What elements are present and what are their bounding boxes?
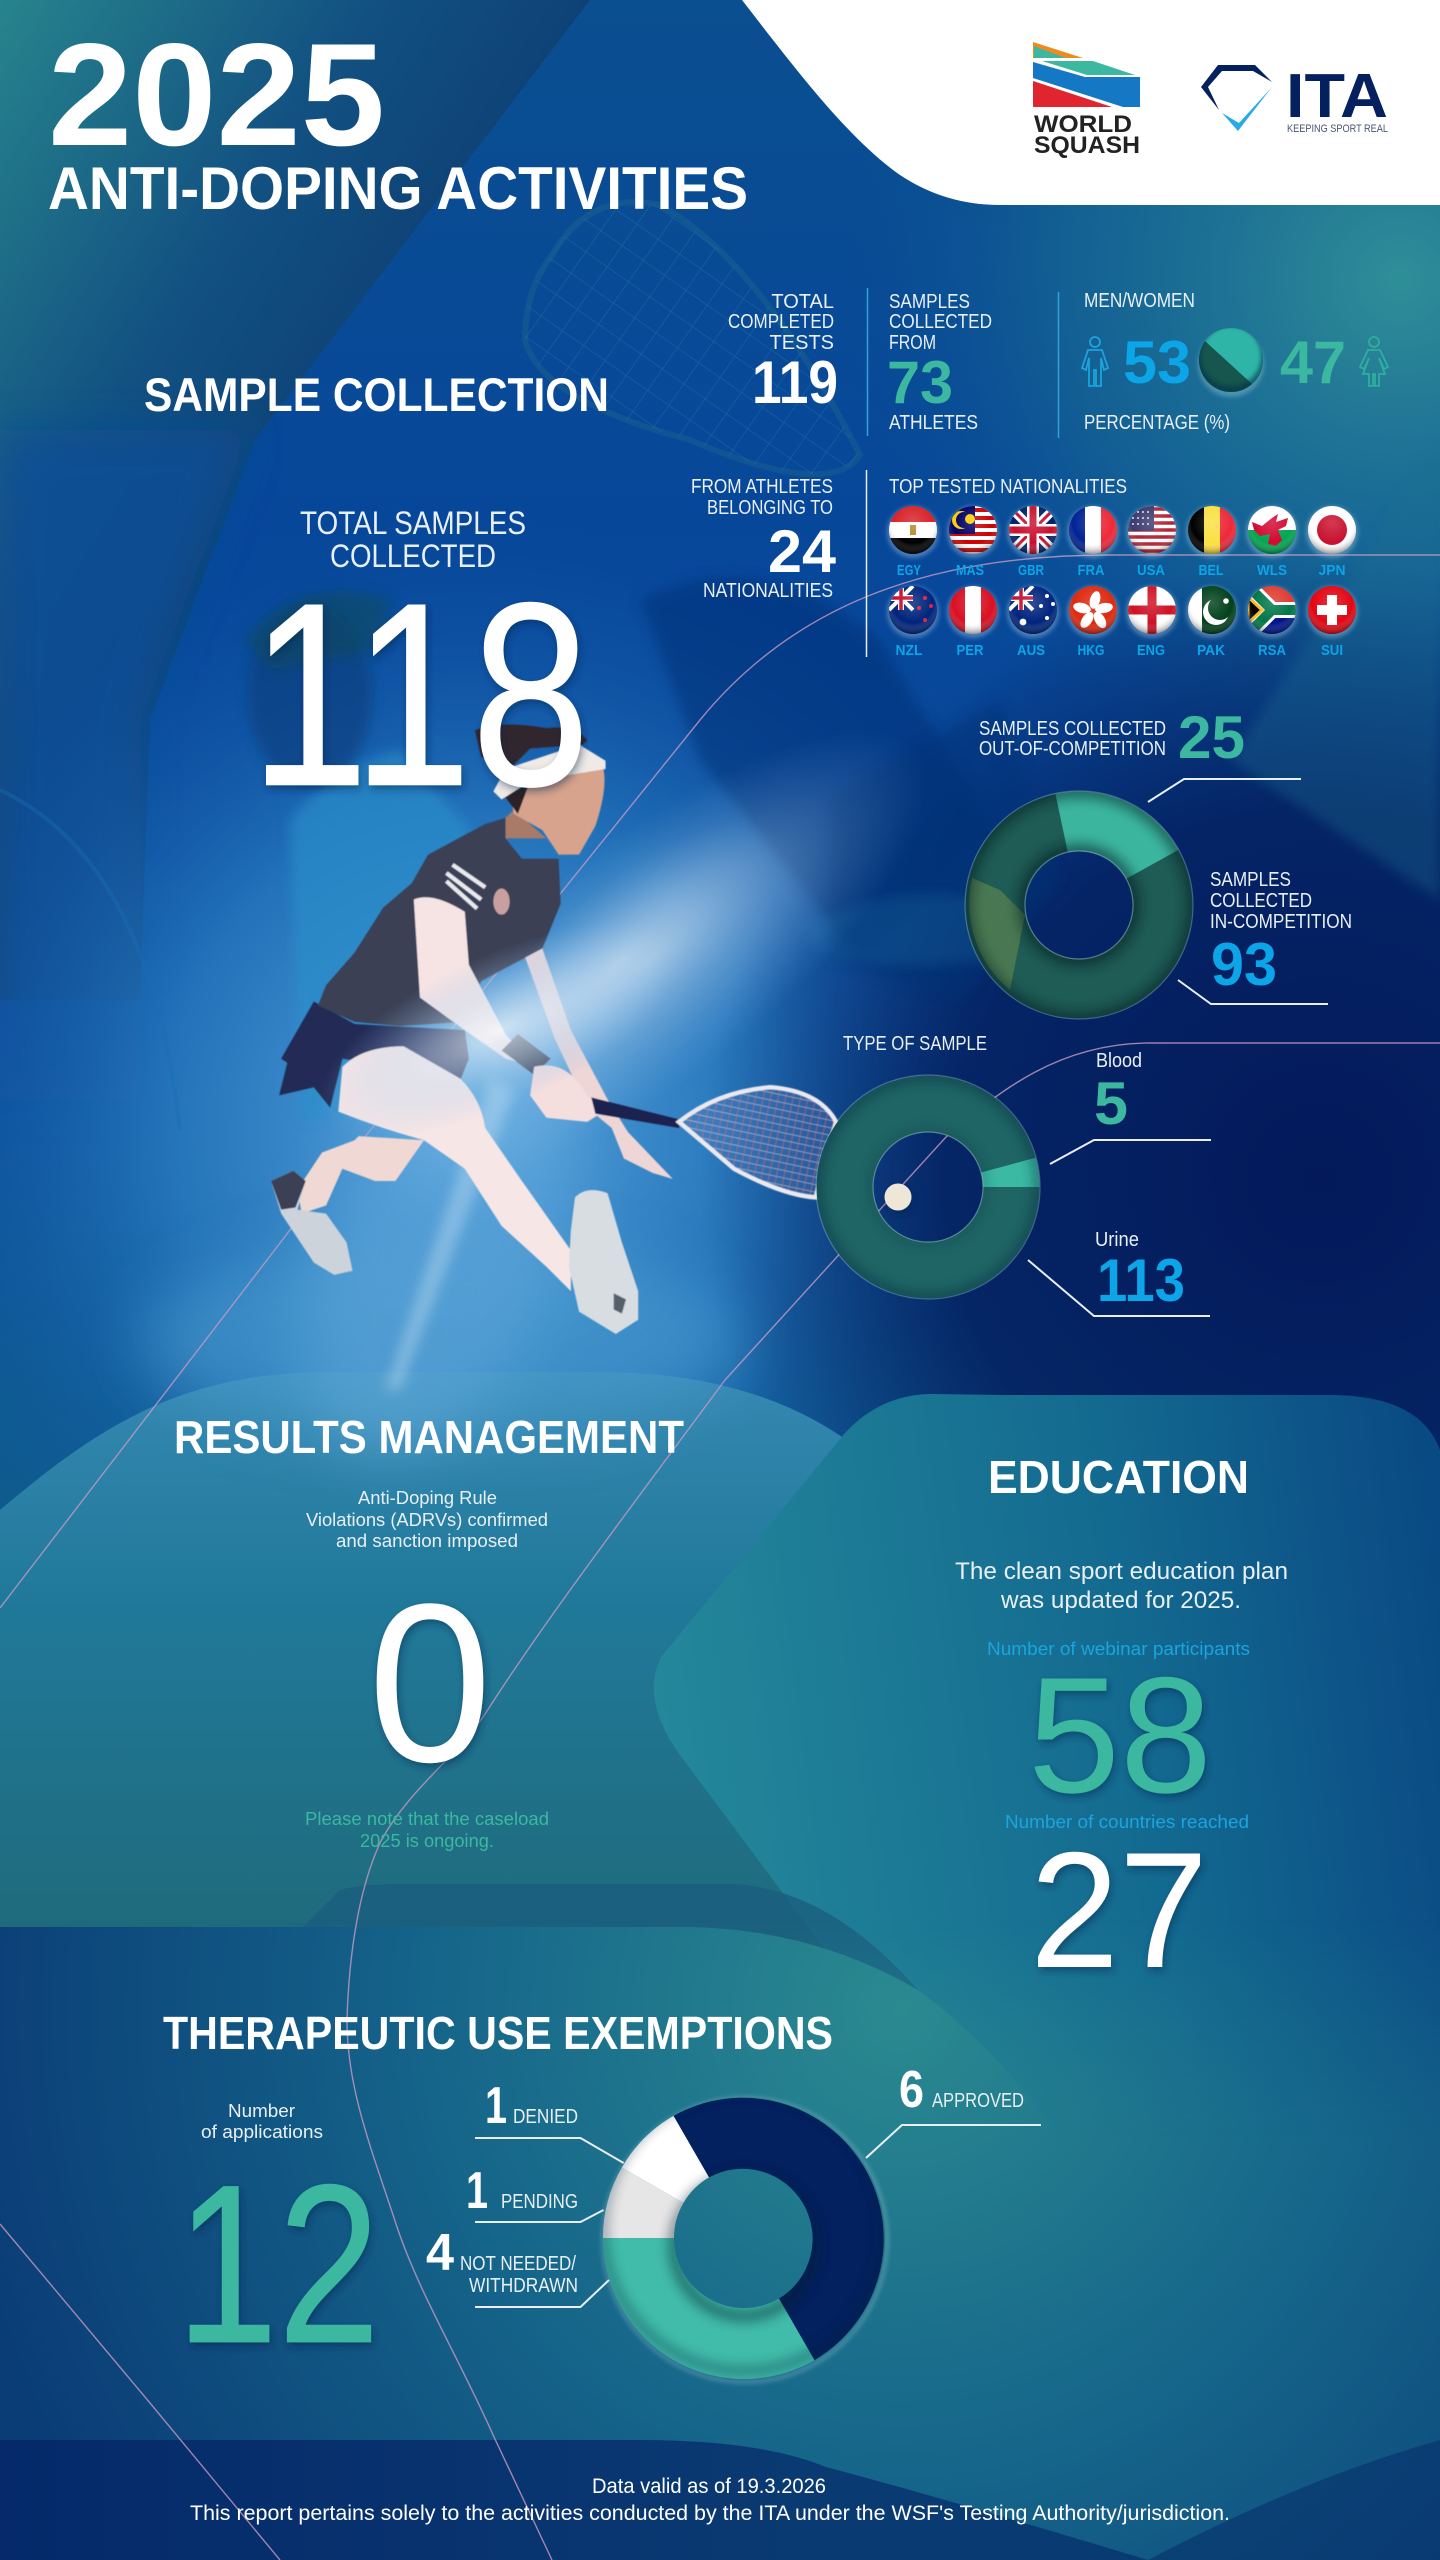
callout: pending: 1 [466,2162,488,2220]
flag codes: NZL [896,642,922,659]
stat: men women percentage: MEN/WOMEN [1084,290,1195,312]
flag: Switzerland [1308,586,1356,634]
stat: twelve: 12 [176,2137,380,2390]
stat: countries reached: Number of countries reached [1005,1811,1249,1832]
flag codes: HKG [1078,642,1104,659]
description [955,1558,1288,1614]
flag: Peru [949,586,997,634]
logo: ITA: KEEPING SPORT REAL [1287,123,1388,135]
headband [493,744,606,800]
description: Anti-Doping Rule [358,1487,497,1508]
callout: denied: DENIED [513,2106,578,2128]
stat: samples collected from athletes: COLLECTED [889,311,992,333]
description [306,1487,548,1551]
far arm [522,948,673,1179]
flag codes: MAS [956,562,984,579]
flag glow row [887,506,1358,638]
light glow over player [287,778,818,1182]
callout: in-competition: SAMPLES [1210,869,1291,891]
flag codes: EGY [897,562,921,579]
label: number of applications [201,2100,323,2142]
callout: pending: PENDING [501,2191,578,2213]
flag: South Africa [1248,586,1296,634]
stat: total completed tests: COMPLETED [728,311,834,333]
decorative curve lines [0,555,1440,2560]
logo panel: white corner [742,0,1440,205]
note: 2025 is ongoing. [360,1830,494,1851]
note [305,1808,549,1851]
panel: therapeutic use exemptions [163,2007,1041,2390]
description: was updated for 2025. [1000,1587,1241,1614]
flag codes: AUS [1017,642,1045,659]
stat: zero: 0 [368,1556,492,1809]
flag: Belgium [1188,506,1236,554]
racket handle [591,1097,681,1128]
neck [506,810,546,838]
stat: samples collected from athletes: SAMPLES [889,291,970,313]
flag codes: JPN [1318,562,1346,579]
heading: EDUCATION [988,1451,1249,1503]
stat: samples collected from athletes: ATHLETES [889,412,978,434]
stat: samples collected from athletes: FROM [889,332,936,354]
callout: urine: 113 [1097,1247,1185,1314]
callout: not needed withdrawn [426,2224,609,2307]
footer text: This report pertains solely to the activities conducted by the ITA under the WSF's Testing Authority/jurisdiction. [190,2502,1230,2525]
wristband [502,1034,550,1075]
flag: Malaysia [949,506,997,554]
stat: webinar participants: Number of webinar participants [987,1638,1250,1659]
back shoe upper [271,1171,306,1210]
label: number of applications: Number [228,2100,295,2121]
note: Please note that the caseload [305,1808,549,1829]
flag codes [896,562,1346,659]
callout: approved [866,2061,1041,2158]
logo: ITA [1201,62,1388,135]
footer text: Data valid as of 19.3.2026 [592,2475,826,2498]
flag: Australia [1009,586,1057,634]
hand [530,1065,604,1122]
shirt [318,818,561,1026]
near arm [414,897,534,1067]
callout: blood: 5 [1094,1070,1128,1137]
stat: samples collected from athletes: 73 [887,349,953,416]
stat: men women percentage: PERCENTAGE (%) [1084,412,1230,434]
logo: ITA: ITA [1286,62,1388,131]
panel: education [955,1451,1288,2002]
back shoe [271,1171,353,1275]
flag: England [1128,586,1176,634]
label: number of applications: of applications [201,2121,323,2142]
callout: approved: 6 [899,2061,924,2119]
stat: samples collected from athletes [868,288,992,436]
flag codes: WLS [1257,562,1287,579]
front shoe [569,1190,638,1334]
flag codes: ENG [1137,642,1165,659]
heading: RESULTS MANAGEMENT [174,1411,684,1463]
title: ANTI-DOPING ACTIVITIES [48,155,748,222]
title: 2025 [48,13,385,176]
stat: nationalities: 24 [768,518,837,585]
callout: pending [466,2162,604,2222]
logo: World Squash: WORLD [1034,111,1132,138]
chart: samples in and out of competition donut [965,791,1193,1019]
flag codes: BEL [1198,562,1224,579]
stat: total completed tests: TESTS [770,332,834,354]
stat: total samples collected: 118 [250,548,590,841]
stat: countries reached: 27 [1030,1818,1208,2002]
stat: webinar participants [987,1638,1250,1827]
stat: men women percentage [1058,290,1388,438]
callout: out-of-competition: OUT-OF-COMPETITION [979,738,1166,760]
flag: Great Britain [1009,506,1057,554]
stat: total completed tests: 119 [752,349,838,416]
heading: THERAPEUTIC USE EXEMPTIONS [163,2007,833,2059]
description: The clean sport education plan [955,1558,1288,1585]
callout: urine: Urine [1095,1229,1139,1251]
callout: denied [475,2077,624,2163]
panel: top tested nationalities [866,470,1358,659]
callout: out-of-competition: SAMPLES COLLECTED [979,718,1166,740]
callout: denied: 1 [485,2077,507,2135]
flag codes: PAK [1197,642,1225,659]
panel: top tested nationalities: TOP TESTED NATIONALITIES [889,476,1127,498]
flag: France [1069,506,1117,554]
description: Violations (ADRVs) confirmed [306,1509,548,1530]
callout: approved: APPROVED [932,2090,1024,2112]
callout: blood [1050,1050,1211,1164]
flag: USA [1128,506,1176,554]
back leg [298,1136,424,1214]
panel: results management [174,1411,684,1851]
description: and sanction imposed [336,1530,518,1551]
callout: out-of-competition: 25 [1178,704,1245,771]
chart: men women pie [1197,322,1265,397]
stat: men women percentage: 53 [1123,329,1191,396]
stat: total completed tests [728,291,838,416]
callout: urine [1028,1229,1210,1316]
flag codes: GBR [1018,562,1044,579]
flag: Wales [1248,506,1296,554]
label: type of sample: TYPE OF SAMPLE [843,1033,987,1055]
chart: type of sample donut [816,1075,1040,1299]
callout: not needed withdrawn: NOT NEEDED/ [460,2253,576,2275]
stat: nationalities: BELONGING TO [707,497,833,519]
callout: in-competition: 93 [1211,931,1277,998]
callout: out-of-competition [979,704,1301,802]
heading: sample collection: SAMPLE COLLECTION [144,368,609,421]
callout: blood: Blood [1096,1050,1142,1072]
hair back [506,773,530,814]
racket head [679,1087,836,1197]
logo: World Squash [1033,42,1140,159]
photo: squash player [271,725,844,1334]
stat: total samples collected: COLLECTED [330,538,496,574]
flag codes: FRA [1078,562,1105,579]
flag codes: PER [956,642,984,659]
callout: not needed withdrawn: 4 [426,2224,454,2282]
flag: Hong Kong [1069,586,1117,634]
flag: New Zealand [889,586,937,634]
callout: in-competition: IN-COMPETITION [1210,911,1352,933]
stat: total samples collected: TOTAL SAMPLES [300,505,526,541]
stat: nationalities [691,476,837,602]
flag codes: RSA [1258,642,1286,659]
callout: in-competition [1178,869,1352,1004]
hair [475,725,587,769]
stat: total completed tests: TOTAL [771,291,834,313]
photo: squash ball [884,1184,912,1210]
flag codes: SUI [1321,642,1343,659]
flag codes: USA [1137,562,1165,579]
light glow behind player [249,656,992,1497]
callout: not needed withdrawn: WITHDRAWN [469,2275,578,2297]
footer text [190,2475,1230,2525]
shorts [279,1002,469,1108]
icon: man [1082,337,1108,386]
icon: woman [1360,337,1388,386]
stat: webinar participants: 58 [1028,1643,1212,1827]
chart: TUE donut [603,2089,887,2382]
flag: Japan [1308,506,1356,554]
face [510,769,605,855]
title [48,13,748,222]
background: ghost figures [0,578,1060,1130]
background: ghost racket top [525,202,860,474]
stat: nationalities: FROM ATHLETES [691,476,833,498]
callout: in-competition: COLLECTED [1210,890,1312,912]
flag: Pakistan [1188,586,1236,634]
stat: nationalities: NATIONALITIES [703,580,833,602]
thigh and front leg [338,1046,571,1291]
logo: World Squash: SQUASH [1034,132,1140,159]
stat: men women percentage: 47 [1280,329,1346,396]
flag: Egypt [889,506,937,554]
